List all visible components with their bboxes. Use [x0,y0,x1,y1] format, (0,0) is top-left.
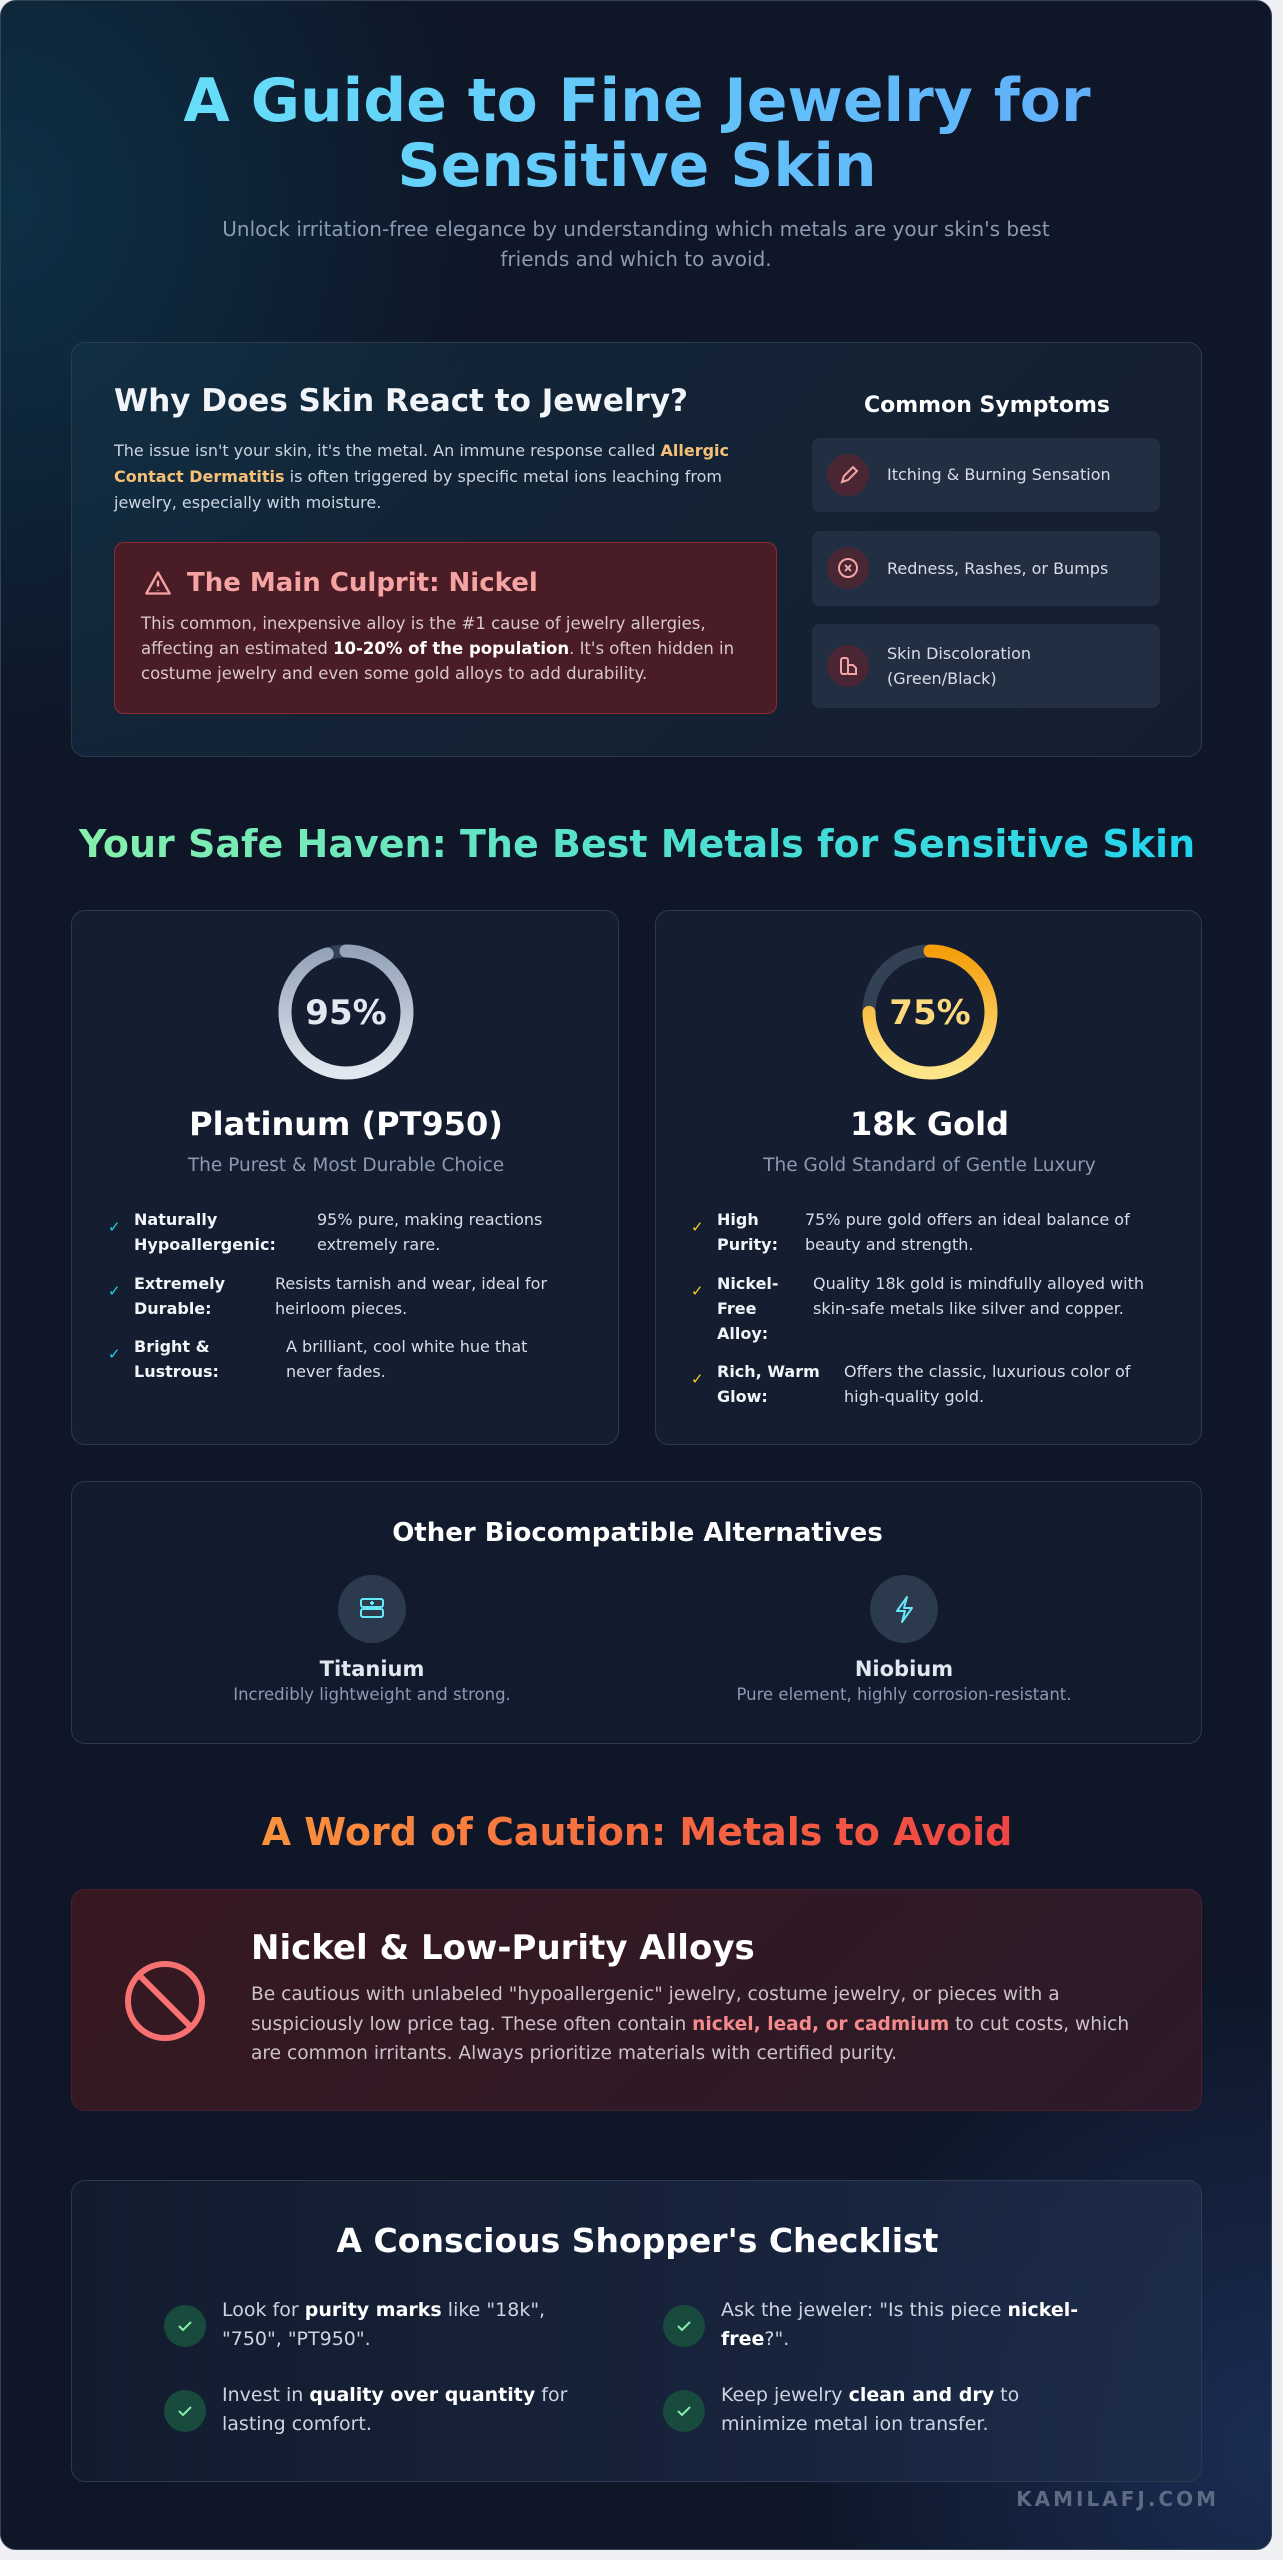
subtitle: platinum: The Purest & Most Durable Choice [188,1155,504,1176]
title [1,69,1273,199]
list: platinum features: Bright & [134,1337,210,1356]
icon: titanium [338,1575,406,1643]
heading: symptoms: Common Symptoms [864,393,1110,418]
symptom: redness [812,531,1160,606]
item: titanium [233,1575,511,1704]
panel: checklist [71,2180,1202,2482]
icon: bolt [870,1575,938,1643]
callout: nickel [114,542,777,714]
text: explanation: The issue isn't your skin, it's the metal. An immune response called Allergic Contact Dermatitis is often triggered by specific metal ions leaching from jewelry, especially with moisture. [114,441,729,512]
text: nickel: This common, inexpensive alloy is the #1 cause of jewelry allergies, affecting an estimated 10-20% of the population. It's often hidden in costume jewelry and even some gold alloys to add durability. [141,614,734,683]
footer: brand: KAMILAFJ.COM [1016,2487,1219,2511]
title: Sensitive Skin [397,131,877,201]
list: platinum features [108,1210,548,1381]
list: gold features: 75% pure gold offers an ideal balance of beauty and strength. [805,1210,1130,1254]
subtitle: Unlock irritation-free elegance by understanding which metals are your skin's best friends and which to avoid. [222,217,1050,271]
list: platinum features: 95% pure, making reactions extremely rare. [317,1210,542,1254]
item: clean and dry: Keep jewelry clean and dry to minimize metal ion transfer. [721,2384,1019,2435]
list: gold features: High [717,1210,759,1229]
list: platinum features: A brilliant, cool white hue that never fades. [286,1337,527,1381]
icon: pencil [827,454,869,496]
heading: nickel alloys: Nickel & Low-Purity Alloys [251,1928,755,1968]
symptom: discoloration: (Green/Black) [887,669,997,688]
symptom: redness: Redness, Rashes, or Bumps [887,559,1108,578]
chart: 95% ring: 95% [305,993,387,1033]
list: gold features [691,1210,1144,1406]
icon: ban [125,1961,205,2041]
item: quality: Invest in quality over quantity for lasting comfort. [222,2384,567,2435]
list: gold features: Quality 18k gold is mindfully alloyed with skin-safe metals like silver and copper. [813,1274,1144,1318]
list: gold features: Offers the classic, luxurious color of high-quality gold. [844,1362,1130,1406]
icon: x circle [827,547,869,589]
list: platinum features: Extremely [134,1274,225,1293]
panel: why skin reacts [71,342,1202,757]
section heading: caution: A Word of Caution: Metals to Avoid [262,1810,1012,1854]
list: gold features: Rich, Warm [717,1362,820,1381]
symptom: discoloration [812,624,1160,708]
heading: platinum: Platinum (PT950) [189,1105,503,1143]
chart: 75% ring: 75% [889,993,971,1033]
heading: nickel: The Main Culprit: Nickel [187,568,538,598]
list: platinum features: ✓ [108,1218,121,1236]
list: gold features: Alloy: [717,1324,768,1343]
text: caution body: Be cautious with unlabeled "hypoallergenic" jewelry, costume jewelry, or pieces with a suspiciously low price tag. These often contain nickel, lead, or cadmium to cut costs, which are common irritants. Always prioritize materials with certified purity. [251,1984,1129,2064]
list: platinum features: ✓ [108,1345,121,1363]
heading: checklist: A Conscious Shopper's Checklist [337,2221,938,2260]
item: nickel-free: Ask the jeweler: "Is this piece nickel-free?". [721,2299,1078,2350]
heading: why: Why Does Skin React to Jewelry? [114,383,688,419]
item: purity marks: Look for purity marks like "18k", "750", "PT950". [222,2299,545,2350]
item: niobium [736,1575,1072,1704]
list: gold features: ✓ [691,1282,704,1300]
list: platinum features: Resists tarnish and wear, ideal for heirloom pieces. [275,1274,547,1318]
list: gold features: Nickel- [717,1274,779,1293]
list: gold features: ✓ [691,1218,704,1236]
icon: warning [145,571,171,595]
list: gold features: Glow: [717,1387,768,1406]
heading: alternatives: Other Biocompatible Alternatives [392,1518,883,1548]
section heading: safe haven: Your Safe Haven: The Best Metals for Sensitive Skin [79,822,1195,866]
panel: platinum [71,910,619,1445]
icon: palette [827,645,869,687]
item: titanium: Titanium [320,1657,424,1681]
symptom: itching [812,438,1160,512]
item: niobium: Pure element, highly corrosion-resistant. [736,1685,1072,1704]
list: platinum features: Hypoallergenic: [134,1235,276,1254]
item: titanium: Incredibly lightweight and strong. [233,1685,511,1704]
item: niobium: Niobium [855,1657,953,1681]
heading: gold: 18k Gold [850,1105,1009,1143]
list: platinum features: Lustrous: [134,1362,219,1381]
chart: 95% ring [278,944,414,1080]
panel: caution [71,1889,1202,2111]
subtitle: gold: The Gold Standard of Gentle Luxury [763,1155,1096,1176]
panel: 18k gold [655,910,1202,1445]
symptom: itching: Itching & Burning Sensation [887,465,1111,484]
list: gold features: Purity: [717,1235,778,1254]
panel: alternatives [71,1481,1202,1744]
list: platinum features: Durable: [134,1299,212,1318]
list: gold features: ✓ [691,1370,704,1388]
list: platinum features: Naturally [134,1210,217,1229]
list: gold features: Free [717,1299,756,1318]
title: A Guide to Fine Jewelry for [183,66,1091,136]
symptom: discoloration: Skin Discoloration [887,644,1031,663]
list: platinum features: ✓ [108,1282,121,1300]
chart: 75% ring [862,944,998,1080]
